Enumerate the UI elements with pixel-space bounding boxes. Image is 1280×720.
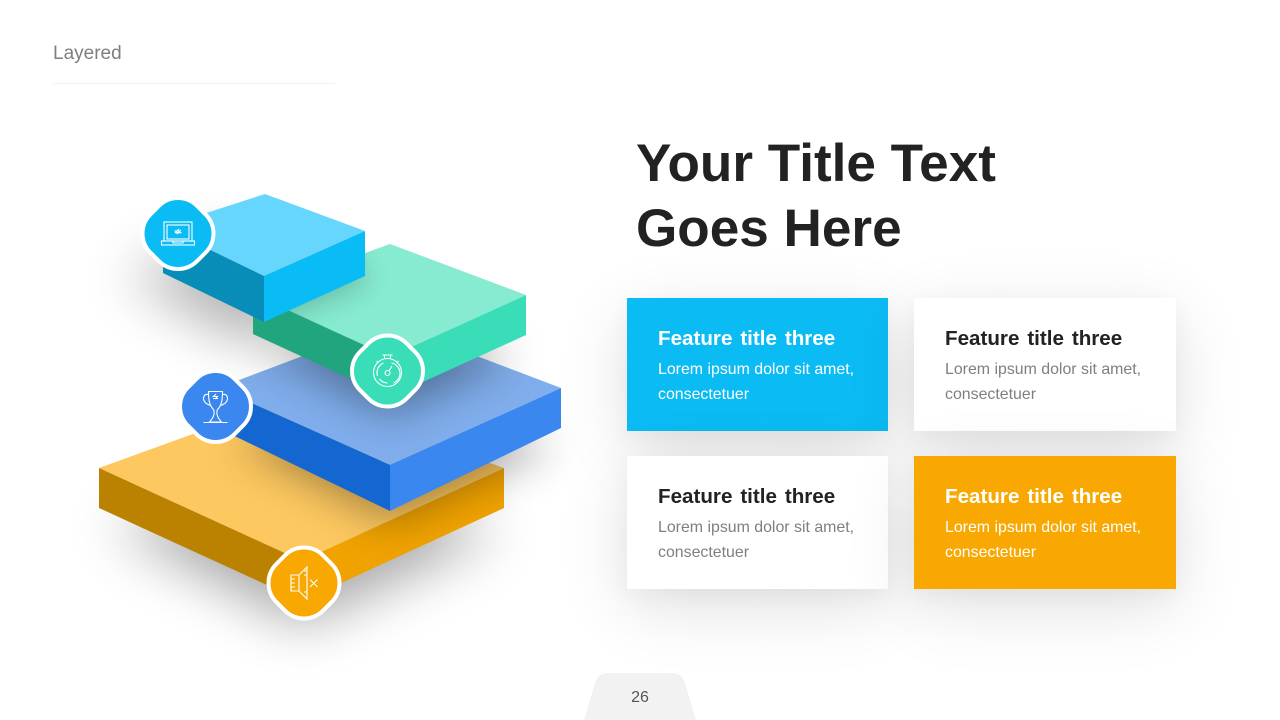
- feature body: Lorem ipsum dolor sit amet,: [658, 361, 854, 378]
- title: Your Title Text: [636, 134, 996, 193]
- icon: laptop badge: [131, 187, 225, 280]
- feature body: Lorem ipsum dolor sit amet,: [945, 519, 1141, 536]
- layer: green block: [253, 244, 526, 415]
- feature heading: Feature title three: [945, 327, 1122, 350]
- feature body: [945, 519, 1141, 561]
- feature heading: Feature title three: [658, 485, 835, 508]
- shadow of cyan block on background: [125, 240, 340, 345]
- layer: blue block: [218, 323, 561, 520]
- section label: Layered: [53, 43, 122, 64]
- panel: feature bottom right: [914, 456, 1176, 589]
- feature body: Lorem ipsum dolor sit amet,: [658, 519, 854, 536]
- feature body: [945, 361, 1141, 403]
- feature body: consectetuer: [945, 386, 1036, 403]
- icon: trophy badge: [169, 360, 262, 453]
- feature body: [658, 519, 854, 561]
- panel: feature top right: [914, 298, 1176, 431]
- page number tab: [584, 673, 696, 720]
- icon: stopwatch badge: [341, 324, 434, 418]
- feature body: consectetuer: [945, 544, 1036, 561]
- layer: yellow block: [99, 395, 504, 625]
- feature body: Lorem ipsum dolor sit amet,: [945, 361, 1141, 378]
- title: Goes Here: [636, 198, 902, 258]
- panel: feature bottom left: [627, 456, 888, 589]
- panel: feature top left: [627, 298, 888, 431]
- page number tab: 26: [631, 688, 649, 706]
- feature body: consectetuer: [658, 544, 749, 561]
- feature heading: Feature title three: [658, 327, 835, 350]
- feature body: [658, 361, 854, 403]
- icon: muted speaker badge: [257, 536, 351, 630]
- title: [636, 134, 996, 258]
- layered isometric illustration: [99, 194, 561, 650]
- feature body: consectetuer: [658, 386, 749, 403]
- layer: cyan block: [163, 194, 365, 322]
- feature heading: Feature title three: [945, 485, 1122, 508]
